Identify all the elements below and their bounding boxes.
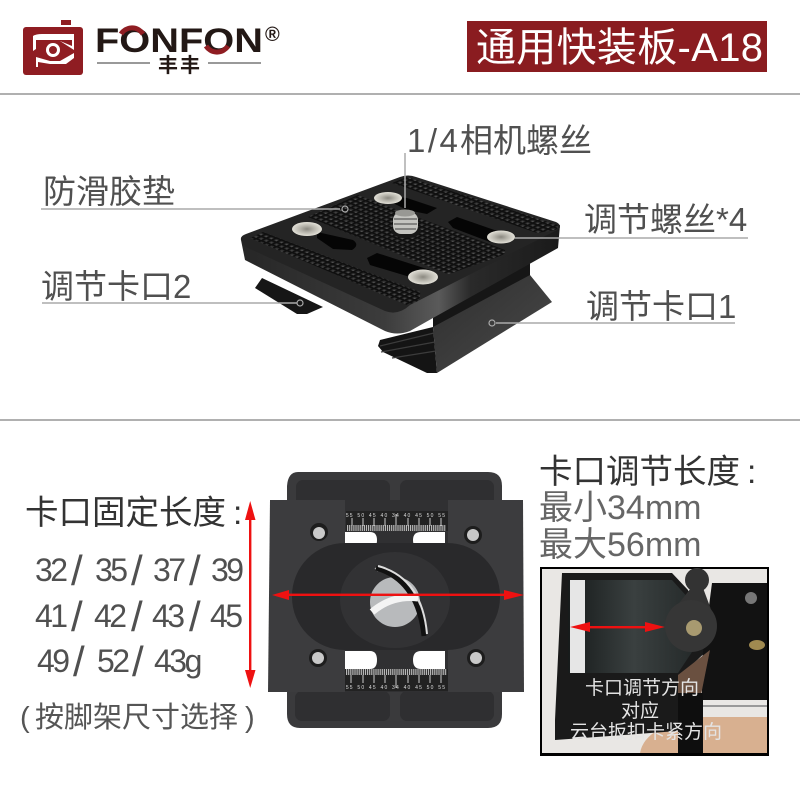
sizes row 1: / bbox=[131, 547, 143, 594]
sizes row 3 bbox=[37, 638, 201, 685]
head bbox=[702, 583, 767, 700]
logo wordmark: FONFON bbox=[95, 22, 263, 60]
cutouts bbox=[345, 532, 377, 549]
clamp 2 bbox=[255, 278, 323, 314]
logo chinese name: 丰丰 bbox=[158, 54, 202, 77]
label: clamp 2: 调节卡口2 bbox=[41, 268, 191, 305]
centre bbox=[345, 500, 449, 692]
arrow: adjust direction bbox=[570, 622, 665, 632]
sizes row 2: 43 bbox=[152, 598, 184, 634]
photo: plate underside bbox=[268, 472, 524, 728]
note: select by tripod size: ) bbox=[245, 702, 255, 734]
label: adjust screws: 调节螺丝*4 bbox=[584, 201, 747, 238]
heading: fixed clamp length: : bbox=[233, 495, 242, 532]
heading: clamp adjust length: 卡口调节长度 bbox=[539, 454, 740, 491]
sizes row 3: 49 bbox=[37, 643, 69, 679]
sizes row 2 bbox=[35, 593, 242, 640]
label: anti-slip pad: 防滑胶垫 bbox=[43, 173, 175, 210]
note: select by tripod size: 按脚架尺寸选择 bbox=[35, 701, 238, 734]
note: select by tripod size: ( bbox=[20, 702, 30, 734]
icon: camera eye logo bbox=[23, 20, 83, 75]
sizes row 1: 37 bbox=[153, 552, 185, 588]
sizes row 1: 35 bbox=[95, 552, 127, 588]
sizes row 3: / bbox=[132, 638, 144, 685]
base plate bbox=[287, 472, 502, 728]
sizes row 1: 39 bbox=[211, 552, 243, 588]
lever bbox=[665, 568, 717, 652]
max length: 最大56mm bbox=[539, 526, 701, 564]
callout lines bbox=[41, 153, 748, 326]
scale top: 55 50 45 40 34 40 45 50 55 bbox=[346, 513, 446, 519]
sizes row 2: 42 bbox=[94, 598, 126, 634]
inset caption: 卡口调节方向 bbox=[585, 677, 699, 699]
sizes row 2: / bbox=[131, 593, 143, 640]
sizes row 1: / bbox=[189, 547, 201, 594]
hex screws bbox=[292, 192, 515, 284]
sizes row 1 bbox=[35, 547, 243, 594]
scale bottom bbox=[345, 669, 449, 691]
inset photo: pan-tilt head clamp bbox=[540, 567, 769, 756]
label: clamp 1: 调节卡口1 bbox=[586, 288, 736, 325]
1/4 camera screw bbox=[391, 210, 421, 238]
sizes row 3: 52 bbox=[97, 643, 129, 679]
inset caption: 云台扳扣卡紧方向 bbox=[570, 721, 722, 743]
title banner: 通用快装板-A18 bbox=[476, 26, 763, 70]
sizes row 2: / bbox=[71, 593, 83, 640]
slots bbox=[317, 232, 356, 250]
product photo: quick release plate bbox=[241, 176, 560, 373]
label: 1/4 camera screw: 相机螺丝 bbox=[460, 122, 592, 159]
sizes row 2: / bbox=[189, 593, 201, 640]
registered mark: ® bbox=[265, 24, 280, 46]
plate body bbox=[241, 225, 560, 334]
rubber pads bbox=[250, 177, 558, 305]
inset caption: 对应 bbox=[621, 700, 659, 722]
label: 1/4 camera screw: 1/4 bbox=[407, 122, 460, 159]
sizes row 1: / bbox=[71, 547, 83, 594]
oval recess bbox=[292, 543, 500, 650]
heading: clamp adjust length: : bbox=[747, 454, 756, 491]
inset caption bbox=[570, 677, 722, 743]
clamp 1 bbox=[378, 258, 552, 373]
sizes row 2: 45 bbox=[210, 598, 242, 634]
wings bbox=[268, 500, 345, 692]
arrow: vertical span bbox=[245, 501, 256, 688]
arrow: horizontal span bbox=[272, 590, 524, 600]
sizes row 1: 32 bbox=[35, 552, 67, 588]
sizes row 3: / bbox=[73, 638, 85, 685]
min length: 最小34mm bbox=[539, 489, 701, 527]
heading: fixed clamp length: 卡口固定长度 bbox=[25, 495, 226, 532]
sizes row 3: 43g bbox=[154, 643, 201, 679]
clamp body bbox=[555, 573, 711, 740]
logo: FONFON bbox=[23, 20, 280, 77]
D-ring screw bbox=[370, 566, 427, 636]
sizes row 2: 41 bbox=[35, 598, 67, 634]
scale bottom: 55 50 45 40 34 40 45 50 55 bbox=[346, 685, 446, 691]
scale top bbox=[346, 511, 448, 531]
mount screws bbox=[309, 523, 485, 667]
